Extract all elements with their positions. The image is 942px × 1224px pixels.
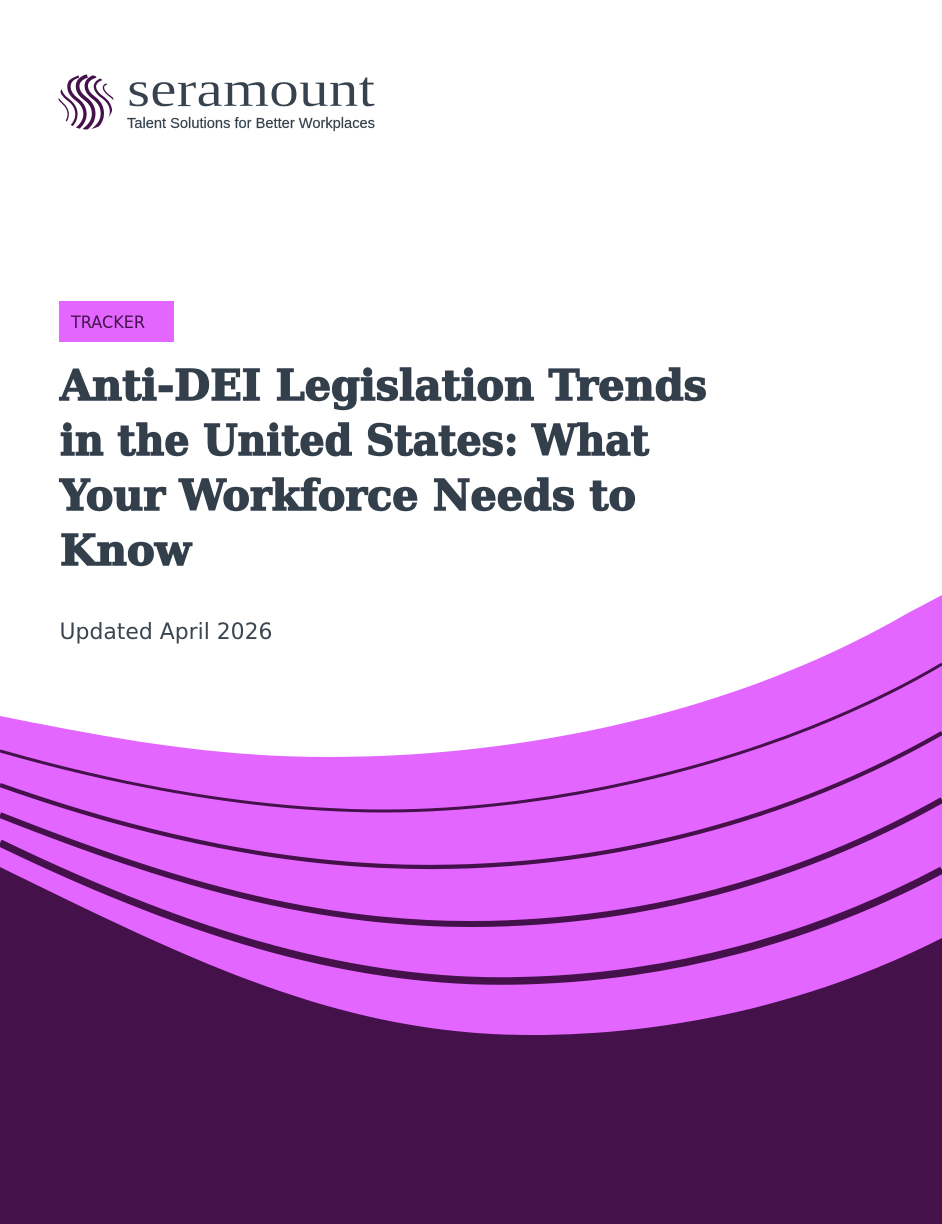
icon: wave-striped circle <box>56 76 118 130</box>
logo: seramount <box>58 74 375 132</box>
tagline: Talent Solutions for Better Workplaces <box>127 115 375 132</box>
tag: tracker: TRACKER <box>70 313 145 332</box>
wave: pink band <box>0 595 942 1224</box>
wave: line 2 <box>0 733 942 867</box>
wave: line 4 <box>0 843 942 981</box>
title: in the United States: What <box>60 416 650 465</box>
wave: line 3 <box>0 800 942 924</box>
wave: dark base <box>0 867 942 1224</box>
title: Your Workforce Needs to <box>59 471 636 520</box>
date line: Updated April 2026 <box>60 620 272 645</box>
title: Know <box>60 526 192 575</box>
wave: line 1 <box>0 664 942 811</box>
title <box>59 361 707 575</box>
tag: tracker <box>59 301 174 342</box>
title: Anti-DEI Legislation Trends <box>59 361 707 410</box>
wordmark: seramount <box>127 62 375 118</box>
